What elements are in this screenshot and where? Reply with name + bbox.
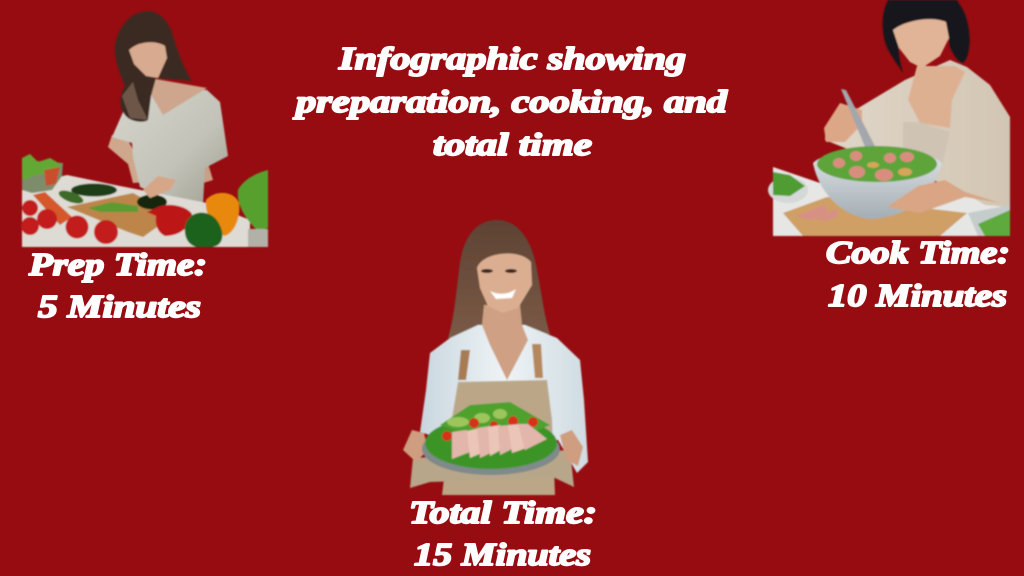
prep carrots	[33, 192, 72, 225]
cook tongs	[841, 89, 878, 154]
total plate	[422, 402, 560, 475]
prep cutting board	[67, 193, 170, 237]
prep time label: 5 Minutes	[38, 288, 201, 324]
prep woman	[108, 11, 228, 204]
prep glass	[248, 229, 268, 247]
cook table	[773, 167, 1010, 236]
prep hand	[143, 176, 176, 198]
cook hand and arm	[887, 180, 1000, 213]
total time label: 15 Minutes	[414, 536, 591, 572]
cook ham slices	[796, 205, 838, 221]
illustration: woman holding salad plate	[403, 220, 588, 495]
prep salad bowl	[22, 154, 63, 193]
prep time label: Prep Time:	[28, 246, 207, 282]
illustration: woman chopping vegetables	[21, 11, 268, 247]
title: total time	[433, 126, 592, 162]
title: Infographic showing	[338, 40, 686, 76]
total woman	[420, 220, 588, 495]
cook left plate	[768, 172, 808, 203]
cook cutting board	[783, 197, 967, 236]
total time label	[409, 494, 597, 572]
prep time label	[28, 246, 207, 324]
total ham slices	[452, 424, 547, 459]
prep tomatoes	[21, 200, 118, 244]
prep cucumbers	[57, 184, 167, 212]
cook time label	[826, 234, 1010, 313]
cook right bowl	[968, 205, 1010, 236]
title: preparation, cooking, and	[292, 83, 728, 119]
total time label: Total Time:	[409, 494, 597, 530]
title	[292, 40, 728, 162]
cook woman	[824, 0, 1010, 207]
prep green pepper	[185, 213, 222, 247]
prep red pepper	[147, 205, 192, 236]
total hands	[403, 430, 583, 466]
prep table	[22, 175, 250, 247]
cook time label: 10 Minutes	[828, 277, 1007, 313]
cook time label: Cook Time:	[826, 234, 1010, 270]
illustration: woman tossing salad	[768, 0, 1010, 236]
prep lettuce	[238, 170, 268, 231]
prep orange pepper	[206, 193, 239, 236]
cook bowl	[813, 146, 942, 219]
total burlap cloth	[410, 450, 574, 488]
